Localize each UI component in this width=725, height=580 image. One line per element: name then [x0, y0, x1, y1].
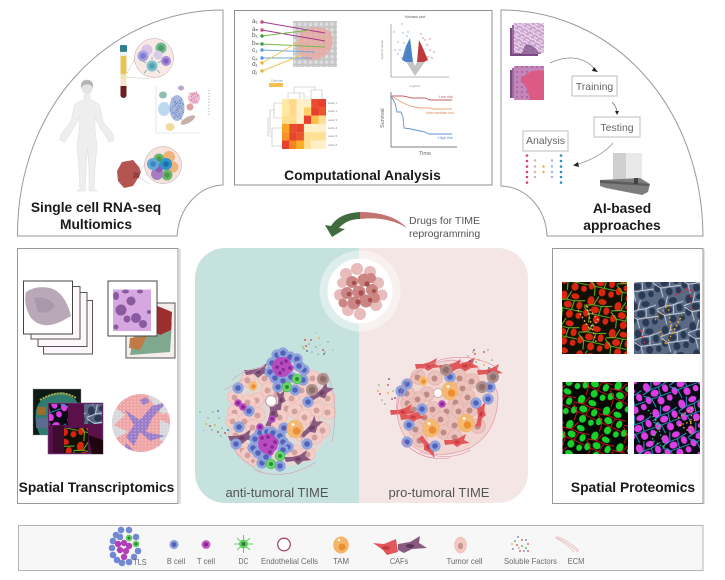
diagram: feature to spatial plate mapping: bₘ: [252, 40, 260, 47]
image: mIF red/green: [562, 282, 627, 354]
legend item: ECM: ECM: [568, 556, 584, 566]
legend item: DC: DC: [238, 556, 248, 566]
chart: survival curves: Low risk: [439, 95, 453, 99]
arrow: drugs for TIME reprogramming: reprogramming: [409, 228, 480, 240]
legend item: tumor cell: Tumor cell: [446, 556, 483, 566]
illustration: tertiary lymphoid structures: [231, 348, 309, 471]
illustration: soluble factors: [199, 332, 334, 437]
arrow: to training: [550, 58, 598, 72]
diagram: feature to spatial plate mapping: dⱼ: [252, 69, 257, 76]
box: training: [572, 76, 617, 96]
chart: volcano plot: [380, 15, 449, 88]
image: mIF magenta/blue: [634, 382, 700, 454]
image: mIF green/red: [562, 382, 628, 454]
icon: human figure: [60, 80, 114, 191]
legend item: endothelial cells: [261, 538, 318, 566]
icon: central tumor spheroid: [320, 250, 400, 332]
box: analysis: [523, 131, 568, 151]
panel: AI-based approaches: [501, 10, 703, 236]
icon: histology slide stack 2: [510, 66, 544, 100]
arrow: to analysis: [573, 143, 613, 167]
legend item: DC: [234, 535, 253, 566]
icon: blood cell bubble: [134, 38, 174, 78]
label: anti-tumoral: anti-tumoral TIME: [225, 485, 329, 500]
chart: volcano plot: Log2 FC: [410, 84, 420, 88]
legend item: TLS: TLS: [133, 557, 147, 567]
illustration: red CAF cells: [390, 357, 503, 461]
legend item: CAFs: CAFs: [390, 556, 408, 566]
chart: heatmap with dendrograms: [268, 78, 338, 149]
legend item: endothelial cells: Endothelial Cells: [261, 556, 318, 566]
illustration: anti-tumoral tumor microenvironment: [199, 332, 336, 474]
chart: survival curves: Time: [419, 151, 431, 157]
icon: tissue section stack: [24, 281, 92, 354]
box: analysis: Analysis: [526, 135, 565, 147]
legend item: CAFs: [373, 536, 427, 566]
legend item: T cell: T cell: [197, 556, 215, 566]
heading: Single cell RNA-seq: [31, 200, 161, 215]
heading line 2: approaches: [583, 218, 661, 233]
chart: heatmap with dendrograms: Label 4: [328, 126, 338, 130]
chart: survival curves: Survival: [380, 108, 386, 128]
chart: heatmap with dendrograms: Label 5: [328, 134, 338, 138]
legend item: soluble factors: Soluble Factors: [504, 556, 557, 566]
chart: survival curves: Intermediate risk: [426, 111, 454, 115]
panel: single cell RNA-seq multiomics: [17, 10, 223, 236]
icon: spatial spot map: [112, 394, 170, 452]
chart: volcano plot: -log10 (P-value): [380, 40, 384, 60]
diagram: feature to spatial plate mapping: c₁: [252, 47, 258, 54]
illustration: pro-tumoral tumor microenvironment: [377, 349, 503, 461]
heading line 2: Multiomics: [60, 217, 132, 232]
icon: slide scanner: [600, 153, 650, 195]
chart: survival curves: High risk: [438, 136, 453, 140]
arrow: drugs for TIME reprogramming: Drugs for TIME: [409, 215, 480, 227]
legend item: soluble factors: [504, 536, 557, 566]
arrow: drugs for TIME reprogramming: [325, 212, 480, 240]
panel: spatial proteomics: [552, 248, 705, 504]
chart: heatmap with dendrograms: Label 3: [328, 118, 338, 122]
box: training: Training: [576, 81, 613, 93]
label: pro-tumoral: pro-tumoral TIME: [389, 485, 490, 500]
legend item: ECM: [555, 536, 584, 566]
heading: Computational Analysis: [284, 168, 441, 183]
chart: heatmap with dendrograms: Color key: [271, 78, 283, 82]
illustration: CAF cells: [228, 363, 336, 465]
diagram: feature to spatial plate mapping: [252, 18, 337, 76]
heading: Spatial Transcriptomics: [19, 480, 175, 495]
legend item: tumor cell: [446, 537, 483, 566]
chart: heatmap with dendrograms: Label 6: [328, 143, 338, 147]
diagram: feature to spatial plate mapping: a₁: [252, 18, 259, 25]
legend: [18, 526, 703, 570]
illustration: vessel: [266, 396, 276, 406]
legend item: TAM: [333, 536, 349, 566]
illustration: pro-tumoral soluble factors: [377, 349, 493, 405]
icon: multiplexed spatial images: [33, 389, 103, 454]
chart: heatmap with dendrograms: Label 1: [328, 101, 338, 105]
diagram: feature to spatial plate mapping: aₙ: [252, 26, 259, 33]
diagram: feature to spatial plate mapping: d₁: [252, 61, 259, 68]
legend item: TLS: [109, 527, 147, 567]
legend item: TAM: TAM: [333, 556, 349, 566]
diagram: feature to spatial plate mapping: b₁: [252, 32, 259, 39]
legend item: B cell: [167, 540, 185, 566]
legend item: T cell: [197, 540, 215, 566]
icon: tumor mass: [117, 160, 150, 188]
legend item: B cell: B cell: [167, 556, 185, 566]
icon: H&E with annotated tissue: [108, 281, 175, 358]
illustration: immune cells: [233, 373, 329, 449]
icon: histology slide stack 1: [510, 23, 544, 56]
chart: survival curves: [380, 92, 457, 157]
chart: tSNE clusters: [156, 86, 209, 133]
heading: Spatial Proteomics: [571, 480, 695, 495]
box: testing: Testing: [600, 122, 634, 134]
panel: tumor immune microenvironment: [195, 248, 528, 503]
icon: blood tube: [120, 45, 150, 98]
panel: spatial transcriptomics: [18, 248, 181, 504]
diagram: feature to spatial plate mapping: cₓ: [252, 55, 258, 62]
icon: tumor cell bubble: [144, 146, 182, 184]
panel: computational analysis: [234, 10, 492, 185]
arrow: to testing: [612, 102, 619, 115]
box: testing: [594, 117, 640, 137]
chart: heatmap with dendrograms: Label 2: [328, 109, 338, 113]
diagram: neural network: [526, 154, 562, 184]
heading: AI-based: [593, 201, 651, 216]
chart: volcano plot: Volcano plot: [405, 15, 426, 19]
image: mIF grey/white: [634, 282, 700, 354]
illustration: pro-tumoral immune cells: [396, 364, 499, 451]
